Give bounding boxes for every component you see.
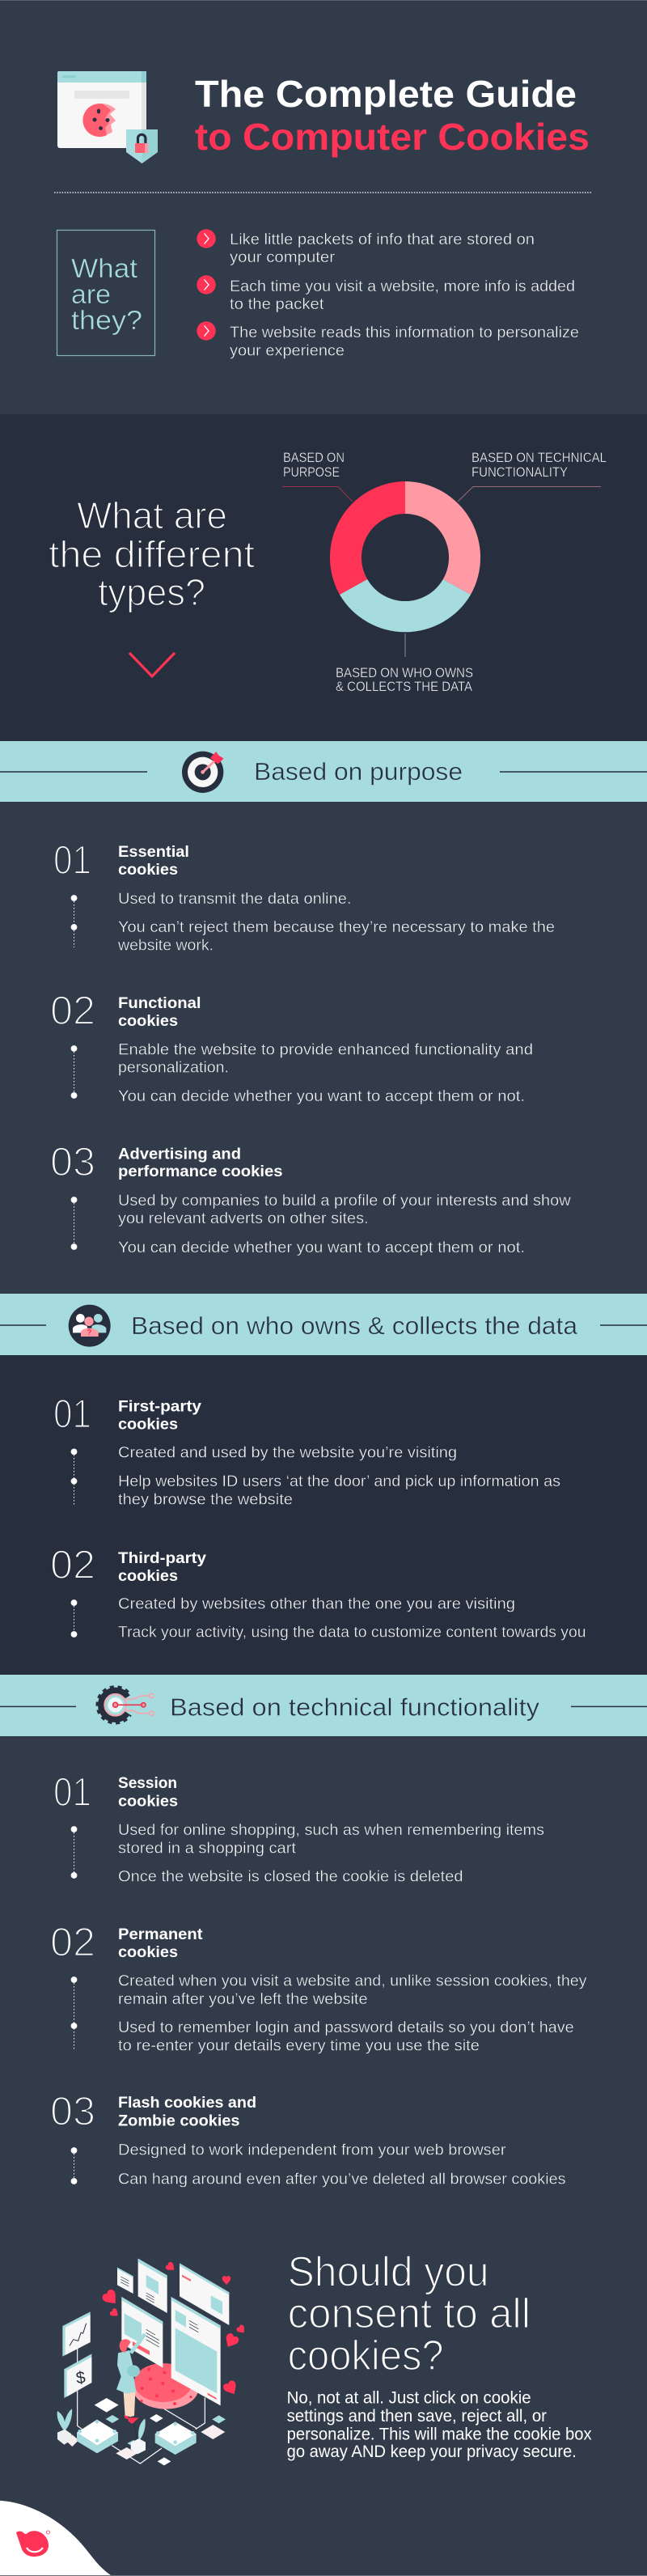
- heading: should you consent: [288, 2249, 531, 2379]
- list: what cookies are: [197, 229, 579, 359]
- item title: cookies: [118, 1567, 178, 1585]
- item text: Help websites ID users ‘at the door’ and pick up information as: [118, 1472, 560, 1490]
- title: The Complete Guide: [195, 73, 577, 115]
- panel: types of cookies: [0, 414, 647, 741]
- item title: Session: [118, 1774, 177, 1792]
- timeline dots: [71, 1448, 77, 1505]
- text block: consent answer: go away AND keep your privacy secure.: [287, 2443, 577, 2461]
- title: [195, 73, 590, 158]
- item: functional cookies: [50, 988, 533, 1105]
- item text: Used to remember login and password details so you don’t have: [118, 2019, 574, 2036]
- item text: Once the website is closed the cookie is deleted: [118, 1868, 463, 1886]
- number 01: 01: [53, 837, 91, 883]
- band heading: Based on purpose: [254, 757, 463, 786]
- text block: consent answer: [287, 2389, 592, 2461]
- item title: Flash cookies and: [118, 2094, 256, 2112]
- item text: [118, 1192, 572, 1256]
- heading: what are the different types: [49, 494, 255, 613]
- callout: what are they box: [57, 230, 155, 356]
- icon: browser window with cookie and shield: [57, 71, 158, 163]
- item title: [118, 1146, 283, 1180]
- heading: what are the different types: the different: [49, 533, 255, 575]
- item title: Third-party: [118, 1549, 206, 1567]
- number 02: 02: [50, 988, 95, 1033]
- heading: should you consent: consent to all: [288, 2290, 531, 2337]
- item text: to re-enter your details every time you use the site: [118, 2037, 480, 2055]
- heading: what are the different types: types?: [98, 571, 205, 613]
- panel: introduction: [0, 0, 647, 414]
- item: third-party cookies: [50, 1542, 586, 1642]
- item text: Can hang around even after you’ve deleted all browser cookies: [118, 2170, 566, 2188]
- item title: [118, 1398, 201, 1434]
- illustration: woman managing isometric web cards on a cookie: $: [75, 2368, 87, 2387]
- label: based on technical functionality: [458, 451, 607, 502]
- item title: Advertising and: [118, 1146, 241, 1163]
- item text: Track your activity, using the data to customize content towards you: [118, 1624, 586, 1642]
- item text: you relevant adverts on other sites.: [118, 1210, 369, 1227]
- item title: Functional: [118, 994, 201, 1012]
- bullet 3: your experience: [230, 341, 345, 359]
- item title: [118, 2094, 256, 2130]
- label: based on technical functionality: FUNCTIONALITY: [472, 465, 568, 480]
- number 01: 01: [53, 1392, 91, 1437]
- bullet 2: to the packet: [230, 295, 324, 313]
- section band: based on technical functionality: [0, 1675, 647, 1736]
- timeline dots: [71, 1197, 77, 1250]
- icon: gear with circuit: [98, 1687, 154, 1722]
- timeline dots: [71, 1045, 77, 1099]
- item text: they browse the website: [118, 1490, 293, 1508]
- icon: target with arrow: [182, 752, 224, 793]
- item title: cookies: [118, 1012, 178, 1030]
- number 02: 02: [50, 1920, 95, 1965]
- item title: [118, 843, 189, 879]
- item: permanent cookies: [50, 1920, 587, 2055]
- item text: Enable the website to provide enhanced functionality and: [118, 1040, 533, 1058]
- number 03: 03: [50, 1139, 95, 1184]
- item text: stored in a shopping cart: [118, 1840, 297, 1858]
- item title: [118, 1549, 206, 1585]
- label: based on purpose: PURPOSE: [283, 465, 340, 480]
- text block: consent answer: personalize. This will make the cookie box: [287, 2425, 592, 2443]
- timeline dots: [71, 1826, 77, 1879]
- item text: [118, 1972, 587, 2055]
- number 02: 02: [50, 1542, 95, 1587]
- callout: what are they box: are: [71, 279, 111, 309]
- item title: cookies: [118, 861, 178, 879]
- item text: Created and used by the website you’re visiting: [118, 1444, 457, 1462]
- bullet 3: [197, 321, 579, 359]
- item title: [118, 1926, 203, 1961]
- item title: [118, 1774, 178, 1811]
- label: based on who owns and collects the data: & COLLECTS THE DATA: [336, 680, 472, 694]
- item: session cookies: [53, 1769, 544, 1886]
- item text: You can decide whether you want to accept them or not.: [118, 1239, 525, 1256]
- arrow: chevron down: [129, 653, 175, 676]
- item: advertising and performance cookies: [50, 1139, 572, 1256]
- band heading: Based on technical functionality: [170, 1693, 540, 1722]
- bullet 2: [197, 275, 575, 313]
- text block: consent answer: No, not at all. Just click on cookie: [287, 2389, 531, 2408]
- bullet 2: Each time you visit a website, more info is added: [230, 278, 575, 295]
- item: essential cookies: [53, 837, 555, 955]
- item text: website work.: [117, 937, 214, 955]
- item text: Used by companies to build a profile of your interests and show: [118, 1192, 572, 1210]
- bullet 1: [197, 229, 535, 266]
- bullet 3: The website reads this information to personalize: [230, 324, 579, 341]
- section band: based on who owns: [0, 1294, 647, 1355]
- item text: Designed to work independent from your web browser: [118, 2142, 506, 2159]
- callout: what are they box: What: [71, 253, 137, 283]
- label: based on who owns and collects the data: [336, 633, 473, 694]
- chart: donut of cookie types: [330, 481, 480, 632]
- item title: cookies: [118, 1416, 178, 1434]
- item text: [118, 2142, 566, 2188]
- item text: Used for online shopping, such as when remembering items: [118, 1821, 544, 1839]
- item text: [118, 1821, 544, 1886]
- item title: Zombie cookies: [118, 2112, 240, 2130]
- label: based on purpose: BASED ON: [283, 451, 345, 465]
- item text: Created by websites other than the one you are visiting: [118, 1595, 515, 1612]
- item text: You can’t reject them because they’re necessary to make the: [118, 918, 555, 936]
- heading: should you consent: cookies?: [288, 2332, 444, 2379]
- logo: white corner with red smile mark: [0, 2501, 647, 2576]
- label: based on technical functionality: BASED ON TECHNICAL: [472, 451, 607, 465]
- item text: Used to transmit the data online.: [118, 890, 351, 908]
- item text: remain after you’ve left the website: [118, 1990, 368, 2008]
- title: to Computer Cookies: [195, 116, 590, 158]
- bullet 1: your computer: [230, 248, 336, 266]
- text block: consent answer: settings and then save, reject all, or: [287, 2407, 547, 2426]
- heading: what are the different types: What are: [77, 494, 227, 536]
- timeline dots: [71, 2147, 77, 2184]
- item: first-party cookies: [53, 1392, 560, 1508]
- item text: [118, 1444, 560, 1508]
- number 03: 03: [50, 2089, 95, 2134]
- panel: based on who owns list: [0, 1355, 647, 1675]
- item title: First-party: [118, 1398, 201, 1416]
- item text: Created when you visit a website and, unlike session cookies, they: [118, 1972, 587, 1990]
- item text: [118, 1040, 533, 1105]
- item: flash and zombie cookies: [50, 2089, 566, 2188]
- section band: based on purpose: [0, 741, 647, 802]
- item title: performance cookies: [118, 1163, 283, 1180]
- band heading: Based on who owns & collects the data: [131, 1311, 578, 1340]
- item text: You can decide whether you want to accept them or not.: [118, 1087, 525, 1105]
- bullet 1: Like little packets of info that are stored on: [230, 231, 535, 248]
- illustration: woman managing isometric web cards on a cookie: [57, 2259, 247, 2465]
- timeline dots: [71, 895, 77, 947]
- callout: what are they box: they?: [71, 305, 142, 335]
- label: based on purpose: [282, 451, 353, 502]
- timeline dots: [71, 1976, 77, 2050]
- label: based on who owns and collects the data: BASED ON WHO OWNS: [336, 666, 473, 680]
- item title: Essential: [118, 843, 189, 861]
- item text: [118, 1595, 586, 1642]
- timeline dots: [71, 1599, 77, 1638]
- item title: [118, 994, 201, 1030]
- icon: people with question mark: [69, 1305, 111, 1347]
- panel: based on purpose list: [0, 802, 647, 1294]
- item title: Permanent: [118, 1926, 203, 1943]
- number 01: 01: [53, 1769, 91, 1815]
- item title: cookies: [118, 1943, 178, 1961]
- item text: personalization.: [118, 1059, 229, 1077]
- panel: based on technical functionality list and conclusion: [0, 1736, 647, 2576]
- heading: should you consent: Should you: [288, 2249, 489, 2296]
- item text: [117, 890, 555, 955]
- item title: cookies: [118, 1793, 178, 1811]
- icon: people with question mark: ?: [87, 1328, 91, 1337]
